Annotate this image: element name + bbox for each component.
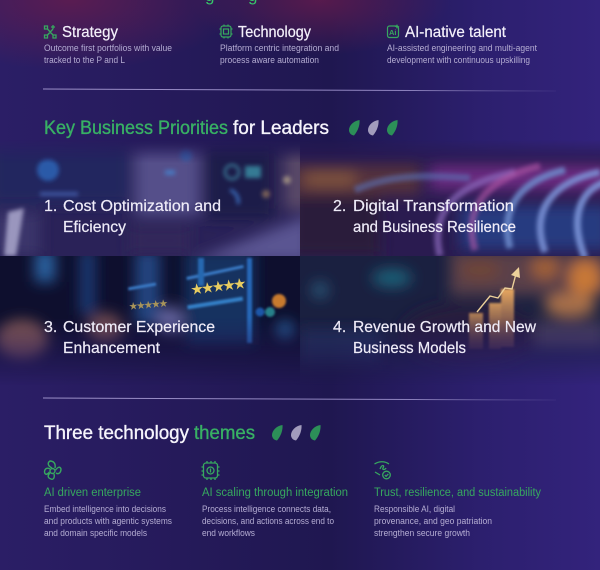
panel: AI driven enterprise: and domain specific models xyxy=(44,528,147,538)
panel text: 1: 1. xyxy=(44,198,57,215)
panel: AI-native talent xyxy=(387,24,537,65)
heading: key business priorities: for Leaders xyxy=(233,118,329,139)
heading: three technology themes: Three technology xyxy=(44,423,189,444)
panel: AI driven enterprise xyxy=(44,461,172,538)
panel: trust, resilience, and sustainability: provenance, and geo patriation xyxy=(374,516,492,526)
panel text: 4 xyxy=(333,319,536,357)
panel: digital transformation image xyxy=(300,144,600,256)
panel text: 4: Business Models xyxy=(353,340,466,357)
panel text: 3: Customer Experience xyxy=(63,319,215,336)
panel: strategy: Strategy xyxy=(62,24,118,41)
heading: three technology themes: themes xyxy=(194,423,255,444)
panel text: 2: and Business Resilience xyxy=(353,219,516,236)
panel: AI scaling through integration: end workflows xyxy=(202,528,255,538)
panel: trust, resilience, and sustainability: Trust, resilience, and sustainability xyxy=(374,487,541,499)
panel: strategy: tracked to the P and L xyxy=(44,55,125,65)
panel text: 3 xyxy=(44,319,215,357)
panel: technology: process aware automation xyxy=(220,55,319,65)
heading: key business priorities xyxy=(44,118,329,139)
panel: technology: Technology xyxy=(238,24,311,41)
panel: revenue growth image xyxy=(300,256,600,376)
panel text: 3: Enhancement xyxy=(63,340,161,357)
panel: AI scaling through integration xyxy=(202,461,348,538)
panel: customer experience image xyxy=(0,256,300,376)
panel text: 4: Revenue Growth and New xyxy=(353,319,536,336)
panel text: 1: Eficiency xyxy=(63,219,126,236)
icon: AI badge: Ai xyxy=(389,28,396,37)
panel text: 3: 3. xyxy=(44,319,57,336)
panel: AI scaling through integration: decisions, and actions across end to xyxy=(202,516,334,526)
icon: pinwheel xyxy=(44,461,61,479)
panel: AI-native talent: development with continuous upskilling xyxy=(387,55,530,65)
panel: AI driven enterprise: AI driven enterprise xyxy=(44,487,141,499)
heading: key business priorities: Key Business Priorities xyxy=(44,118,228,139)
icon: growth bars and arrow xyxy=(469,267,520,349)
panel text: 2: 2. xyxy=(333,198,346,215)
icon: chip xyxy=(220,24,232,38)
panel: strategy: Outcome first portfolios with value xyxy=(44,43,172,53)
panel text: 2: Digital Transformation xyxy=(353,198,514,215)
panel text: 2 xyxy=(333,198,516,236)
panel: technology: Platform centric integration and xyxy=(220,43,339,53)
heading: three technology themes xyxy=(44,423,255,444)
panel: trust, resilience, and sustainability xyxy=(374,462,541,538)
panel: AI-native talent: AI-native talent xyxy=(405,24,507,41)
panel: AI driven enterprise: and products with agentic systems xyxy=(44,516,172,526)
icon: processor xyxy=(202,461,220,480)
panel: AI scaling through integration: AI scaling through integration xyxy=(202,487,348,499)
icon: handshake check xyxy=(374,462,390,479)
icon: three leaves xyxy=(349,120,398,136)
panel text: 4: 4. xyxy=(333,319,346,336)
panel: strategy xyxy=(44,24,172,65)
panel: AI-native talent: AI-assisted engineering and multi-agent xyxy=(387,43,537,53)
panel: technology xyxy=(220,24,339,65)
clipped heading fragment at top xyxy=(205,0,257,5)
panel: cost optimization image xyxy=(0,146,300,256)
icon: strategy xyxy=(44,25,56,38)
icon: small rating stars: ★★★★★ xyxy=(128,298,169,313)
icon: three leaves xyxy=(272,425,321,440)
panel: trust, resilience, and sustainability: Responsible AI, digital xyxy=(374,504,455,514)
icon: AI badge xyxy=(388,24,400,38)
panel text: 1 xyxy=(44,198,221,236)
icon: large rating stars: ★★★★★ xyxy=(189,275,247,299)
panel: AI scaling through integration: Process intelligence connects data, xyxy=(202,504,331,514)
panel: AI driven enterprise: Embed intelligence into decisions xyxy=(44,504,166,514)
panel text: 1: Cost Optimization and xyxy=(63,198,221,215)
panel: trust, resilience, and sustainability: strengthen secure growth xyxy=(374,528,470,538)
